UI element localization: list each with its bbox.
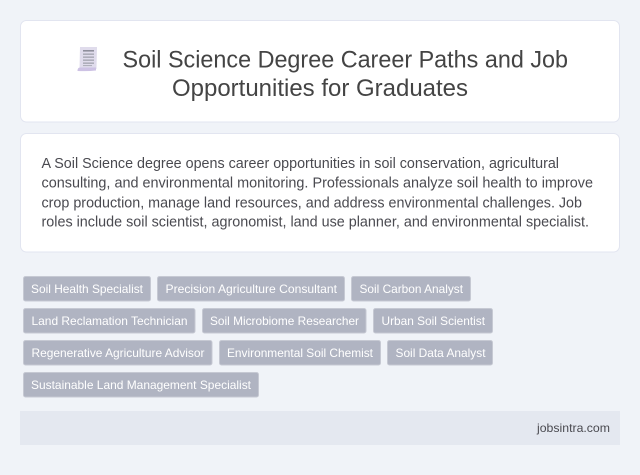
tag: Soil Carbon Analyst: Soil Carbon Analyst: [360, 282, 464, 296]
title: Opportunities for Graduates: [172, 75, 468, 102]
footer source text: jobsintra.com: [536, 421, 610, 435]
tag: Environmental Soil Chemist: Environmental Soil Chemist: [227, 346, 374, 360]
panel: header card: [20, 20, 620, 122]
tag: Soil Health Specialist: Soil Health Specialist: [31, 282, 144, 296]
tags: job titles: [24, 276, 492, 397]
description text: consulting, and environmental monitoring. Professionals analyze soil health to improve: [42, 176, 593, 192]
footer bar: [20, 411, 620, 445]
description text: [42, 156, 593, 230]
icon: paper scroll: [78, 47, 97, 71]
title: [122, 46, 568, 102]
panel: description card: [20, 134, 620, 252]
description text: roles include soil scientist, agronomist, land use planner, and environmental specialist.: [42, 214, 589, 230]
tag: Soil Microbiome Researcher: [202, 308, 366, 333]
tag: Urban Soil Scientist: [374, 308, 492, 333]
tag: Sustainable Land Management Specialist: [24, 372, 258, 397]
tag: Precision Agriculture Consultant: Precision Agriculture Consultant: [166, 282, 338, 296]
tag: Soil Data Analyst: [388, 340, 492, 365]
tag: Soil Carbon Analyst: [352, 276, 470, 301]
tag: Regenerative Agriculture Advisor: [24, 340, 212, 365]
description text: crop production, manage land resources, and address environmental challenges. Job: [42, 196, 582, 212]
tag: Soil Microbiome Researcher: Soil Microbiome Researcher: [210, 314, 359, 328]
tag: Environmental Soil Chemist: [220, 340, 380, 365]
tag: Precision Agriculture Consultant: [158, 276, 344, 301]
description text: A Soil Science degree opens career opportunities in soil conservation, agricultural: [42, 156, 559, 172]
tag: Land Reclamation Technician: Land Reclamation Technician: [32, 314, 188, 328]
tag: Regenerative Agriculture Advisor: Regenerative Agriculture Advisor: [32, 346, 205, 360]
title: Soil Science Degree Career Paths and Job: [122, 46, 568, 74]
tag: Sustainable Land Management Specialist: Sustainable Land Management Specialist: [31, 378, 252, 392]
tag: Urban Soil Scientist: Urban Soil Scientist: [382, 314, 486, 328]
tag: Soil Data Analyst: Soil Data Analyst: [396, 346, 486, 360]
tag: Soil Health Specialist: [24, 276, 150, 301]
tag: Land Reclamation Technician: [24, 308, 195, 333]
